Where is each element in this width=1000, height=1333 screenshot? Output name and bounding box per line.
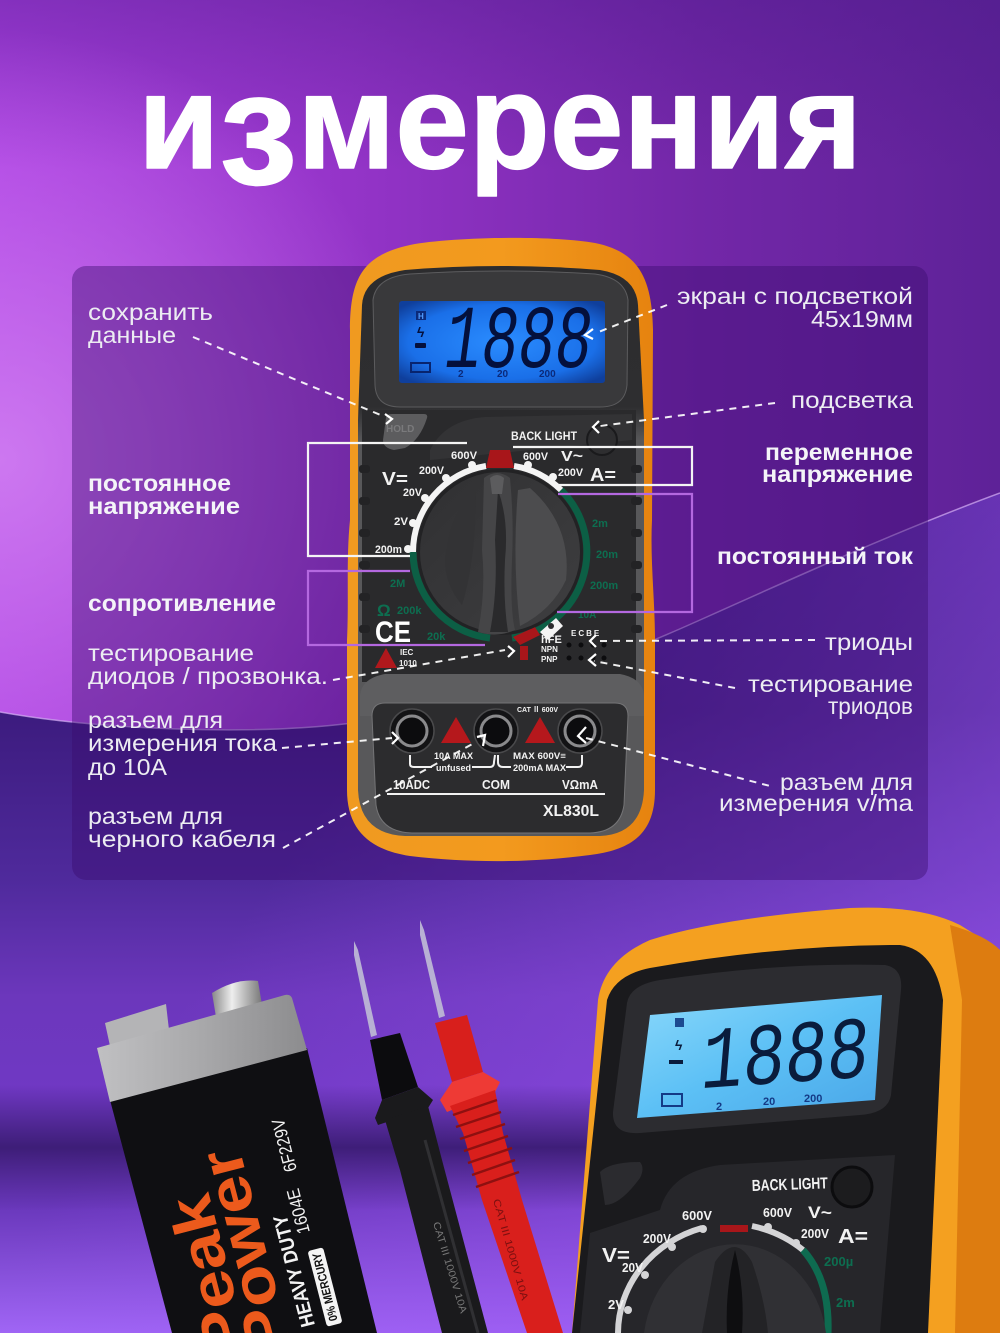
close-up labels: 20V xyxy=(622,1260,643,1275)
labels left: данные xyxy=(88,322,176,348)
labels right: разъем для xyxy=(780,769,913,795)
jack markings: 200mA MAX xyxy=(513,763,567,774)
close-up knob xyxy=(644,1244,826,1333)
labels right: напряжение xyxy=(762,461,913,487)
labels right: подсветка xyxy=(791,387,913,413)
warning triangles xyxy=(441,717,555,743)
close-up labels: BACK LIGHT xyxy=(752,1175,828,1195)
lcd screen xyxy=(399,293,605,395)
transistor socket: ECBE xyxy=(571,629,601,638)
close-up lcd: 200 xyxy=(804,1093,822,1105)
labels left: черного кабеля xyxy=(88,826,276,852)
label: backlit screen: экран с подсветкой xyxy=(677,283,913,309)
labels left: разъем для xyxy=(88,707,223,733)
leader: backlight xyxy=(593,403,775,433)
jack markings: XL830L xyxy=(543,803,599,820)
transistor socket: NPN xyxy=(541,645,558,654)
close-up lcd: 1888 xyxy=(698,1004,872,1115)
dial labels green: Ω xyxy=(377,601,391,620)
labels left: диодов / прозвонка. xyxy=(88,663,328,689)
dial labels green: 20k xyxy=(427,631,446,643)
transistor socket xyxy=(541,629,606,664)
close-up labels: 200µ xyxy=(824,1254,853,1269)
dial labels white: A= xyxy=(590,465,616,485)
jack markings: VΩmA xyxy=(562,777,599,792)
labels right xyxy=(677,283,914,816)
dial labels white: 20V xyxy=(403,487,423,499)
lcd screen: H xyxy=(418,312,424,321)
backlight button xyxy=(587,425,617,455)
close-up lcd: 20 xyxy=(763,1096,775,1108)
battery xyxy=(97,980,377,1333)
dial ring green xyxy=(413,490,587,638)
close-up green ring xyxy=(803,1250,828,1333)
close-up casing xyxy=(572,908,1000,1333)
close-up labels: 200V xyxy=(643,1231,671,1246)
battery terminals xyxy=(105,1004,169,1046)
dial labels green: 200k xyxy=(397,605,422,617)
leader: triode test xyxy=(589,654,735,688)
transistor socket: hFE xyxy=(541,634,562,646)
red probe: CAT III 1000V 10A xyxy=(490,1198,530,1302)
red probe xyxy=(420,920,563,1333)
close-up labels: V~ xyxy=(808,1203,832,1222)
leader: v/ma jack xyxy=(578,727,770,786)
close-up labels: 600V xyxy=(763,1205,792,1220)
dial labels white: 600V xyxy=(451,450,478,462)
labels right: измерения v/ma xyxy=(719,790,913,816)
battery: HEAVY DUTY xyxy=(270,1212,320,1329)
multimeter close-up xyxy=(572,908,1000,1333)
close-up labels: 2m xyxy=(836,1295,855,1310)
dial labels white: 2V xyxy=(394,516,409,528)
dial labels green: 2M xyxy=(390,578,405,590)
title: з xyxy=(219,39,297,218)
battery cap xyxy=(97,995,307,1102)
upper dark strip xyxy=(362,410,636,682)
lcd screen: 2 xyxy=(458,369,464,380)
dial labels green: 2m xyxy=(592,518,608,530)
labels right: постоянный ток xyxy=(717,543,914,569)
title: мерения xyxy=(297,46,862,197)
dial labels green xyxy=(377,518,618,643)
labels right: триоды xyxy=(825,629,913,655)
dial labels white xyxy=(375,429,616,556)
dial labels white: V~ xyxy=(561,448,583,465)
labels right: тестирование xyxy=(748,671,913,697)
close-up lcd xyxy=(637,995,882,1118)
dial labels white: 200m xyxy=(375,544,402,556)
leader: hold xyxy=(193,337,392,424)
jacks xyxy=(390,709,602,753)
close-up dial panel xyxy=(580,1155,895,1333)
leader: 10a jack xyxy=(282,732,398,748)
leader: triodes xyxy=(590,635,815,647)
battery: 6F229V xyxy=(268,1117,301,1174)
dial labels white: V= xyxy=(382,469,408,489)
black probe xyxy=(354,941,488,1333)
battery: 1604E xyxy=(283,1186,314,1236)
lower band xyxy=(360,674,644,716)
jack markings: unfused xyxy=(436,763,471,774)
panel: dark backing xyxy=(72,266,928,880)
transistor socket: PNP xyxy=(541,655,558,664)
rotary knob xyxy=(417,469,583,635)
jack markings: COM xyxy=(482,777,510,792)
red marks xyxy=(486,450,540,660)
close-up screen housing xyxy=(613,965,901,1133)
black probe: CAT III 1000V 10A xyxy=(430,1221,469,1315)
bracket: resistance xyxy=(308,571,485,645)
close-up side shade xyxy=(950,925,1000,1333)
lcd screen: 20 xyxy=(497,369,509,380)
multimeter main xyxy=(347,238,655,861)
labels left: измерения тока xyxy=(88,730,277,756)
dial labels green: 200m xyxy=(590,580,618,592)
jack panel xyxy=(372,703,628,833)
labels right: триодов xyxy=(828,693,913,719)
mercury label: 0% MERCURY xyxy=(309,1251,341,1323)
hold button xyxy=(383,414,427,450)
close-up dots xyxy=(624,1223,800,1314)
labels left: до 10А xyxy=(88,754,168,780)
screen housing xyxy=(373,271,628,407)
jack markings: 10A MAX xyxy=(434,751,474,762)
labels right: 45x19мм xyxy=(811,306,913,332)
dial labels white: 200V xyxy=(419,465,445,477)
leader: diode xyxy=(333,646,514,680)
labels left: сопротивление xyxy=(88,590,276,616)
grey shell xyxy=(358,266,644,836)
jack markings: CAT Ⅱ 600V xyxy=(517,705,558,714)
backlight recess xyxy=(430,414,632,460)
close-up backlight button xyxy=(832,1167,872,1207)
battery body xyxy=(110,1048,377,1333)
bracket: dc current xyxy=(557,494,692,612)
jack markings: 10ADC xyxy=(393,777,431,792)
lcd screen: 200 xyxy=(539,369,556,380)
close-up labels xyxy=(602,1175,868,1312)
close-up labels: 600V xyxy=(682,1208,712,1223)
label: save data: сохранить xyxy=(88,299,213,325)
close-up dial ring xyxy=(618,1226,803,1333)
iec warning: 1010 xyxy=(399,659,417,668)
close-up labels: 200V xyxy=(801,1226,829,1241)
labels left: постоянное xyxy=(88,470,231,496)
jack markings: MAX 600V≡ xyxy=(513,751,566,762)
dial labels white: 200V xyxy=(558,467,584,479)
close-up lcd: 2 xyxy=(716,1101,722,1113)
hold button: HOLD xyxy=(386,424,414,435)
close-up face xyxy=(572,945,943,1333)
close-up lcd: ϟ xyxy=(675,1037,683,1053)
dial labels green: 10A xyxy=(578,610,596,621)
close-up hold button xyxy=(600,1162,642,1205)
leader: black cable xyxy=(283,735,485,848)
dial ring white xyxy=(413,466,561,552)
bracket: dc voltage xyxy=(308,443,467,556)
lcd digits: 1888 xyxy=(445,293,592,395)
labels right: переменное xyxy=(765,439,913,465)
close-up labels: A= xyxy=(838,1226,868,1248)
iec warning: IEC xyxy=(400,648,414,657)
title: и xyxy=(138,46,221,197)
dial dots xyxy=(404,461,563,640)
side ribs xyxy=(359,465,642,633)
lcd screen: ϟ xyxy=(417,324,425,340)
close-up labels: V= xyxy=(602,1245,630,1267)
ce mark: CE xyxy=(375,616,411,649)
orange casing xyxy=(347,238,655,861)
dial labels white: 600V xyxy=(523,451,549,463)
labels left xyxy=(88,299,328,852)
labels left: напряжение xyxy=(88,493,240,519)
close-up labels: 2V xyxy=(608,1297,624,1312)
dial labels white: BACK LIGHT xyxy=(511,429,578,443)
labels left: разъем для xyxy=(88,803,223,829)
close-up red mark xyxy=(720,1225,748,1232)
iec warning xyxy=(375,648,417,668)
dial labels green: 20m xyxy=(596,549,618,561)
jack markings xyxy=(387,705,605,820)
leader: screen xyxy=(585,305,667,339)
labels left: тестирование xyxy=(88,640,254,666)
bracket: ac voltage xyxy=(513,447,692,485)
